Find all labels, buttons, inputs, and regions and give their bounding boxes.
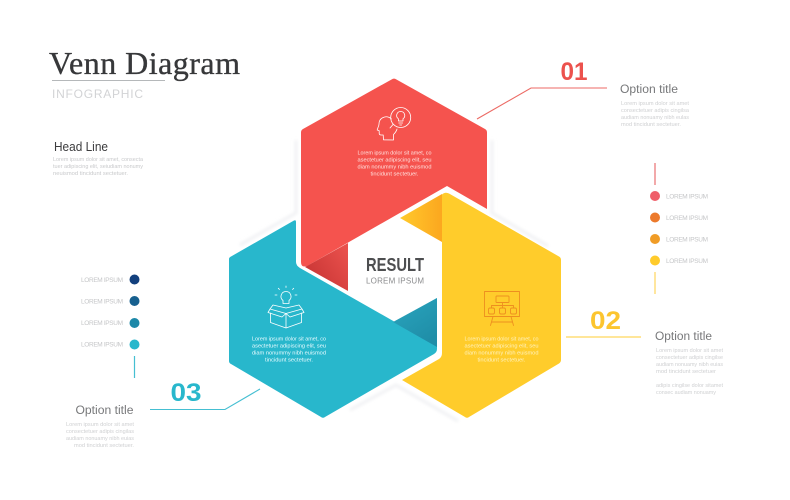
text: yellow panel	[464, 336, 538, 364]
legend: right	[650, 163, 708, 294]
icon: box with light bulb	[268, 286, 304, 328]
callout: 02: 02	[590, 307, 621, 335]
panel: center result	[366, 255, 424, 286]
text: teal panel: diam nonummy nibh euismod	[252, 350, 326, 356]
icon: presentation board	[484, 292, 520, 326]
text block: head line: tuer adipiscing elit, seiudiam nonumy	[53, 164, 143, 170]
text: red panel: Lorem ipsum dolor sit amet, co	[358, 150, 432, 156]
text block: option 1: consectetuer adipis cingilsa	[621, 108, 690, 114]
title	[49, 45, 240, 101]
panel: teal hexagon	[229, 220, 437, 418]
fold: yellow	[400, 194, 442, 242]
text block: option 3: Option title	[76, 405, 134, 417]
text: yellow panel: asectetuer adipiscing elit, seu	[464, 344, 538, 350]
fold: red	[305, 243, 348, 291]
callout: 03	[66, 379, 260, 449]
panel: center result: LOREM IPSUM	[366, 276, 424, 286]
text block: option 1: Option title	[620, 84, 678, 96]
text block: option 3: mod tincidunt sectetuer.	[74, 443, 134, 449]
text: teal panel: Lorem ipsum dolor sit amet, co	[252, 336, 326, 342]
text: red panel: tincidunt sectetuer.	[370, 172, 419, 178]
legend: right: LOREM IPSUM	[666, 194, 708, 200]
legend: right: LOREM IPSUM	[666, 258, 708, 265]
soft shadow in the hexagon notches	[240, 140, 548, 421]
legend: right: LOREM IPSUM	[666, 215, 708, 222]
text block: head line: Head Line	[54, 140, 108, 154]
text: yellow panel: diam nonummy nibh euismod	[464, 350, 538, 356]
callout: 01	[477, 58, 690, 128]
title: INFOGRAPHIC	[52, 87, 143, 101]
text block: option 3: consectetuer adipis cingilas	[66, 429, 134, 435]
text: teal panel: tincidunt sectetuer.	[265, 358, 313, 364]
legend: left: LOREM IPSUM	[81, 320, 123, 327]
text block: option 3	[66, 405, 134, 449]
text: red panel: diam nonummy nibh euismod	[358, 164, 432, 170]
text block: option 2: consec audiam nonuamy	[656, 390, 716, 396]
text block: option 1: Lorem ipsum dolor sit amet	[621, 101, 689, 107]
text block: option 2	[655, 331, 723, 396]
text block: option 2: Option title	[655, 331, 712, 343]
panel: yellow hexagon	[400, 193, 561, 418]
text block: option 2: adipis cingilse dolor sitamet	[656, 383, 723, 389]
text block: head line: Lorem ipsum dolor sit amet, consecta	[53, 157, 144, 163]
callout: 02	[566, 307, 723, 396]
text: yellow panel: Lorem ipsum dolor sit amet, co	[464, 336, 538, 342]
text: yellow panel: tincidunt sectetuer.	[478, 358, 526, 364]
text: teal panel: asectetuer adipiscing elit, seu	[252, 344, 326, 350]
legend: left	[81, 274, 140, 378]
callout: 01: 01	[560, 58, 588, 86]
icon: head with light bulb	[377, 108, 411, 140]
text block: option 2: mod tincidunt sectetuer	[656, 369, 716, 375]
text block: head line	[53, 140, 144, 177]
text: red panel	[358, 150, 432, 178]
text block: option 3: Lorem ipsum dolor sit amet	[66, 422, 134, 428]
text block: option 3: audiam nonuamy nibh euias	[66, 436, 134, 442]
title: Venn Diagram	[49, 45, 240, 81]
legend: left: LOREM IPSUM	[81, 298, 123, 306]
legend: left: LOREM IPSUM	[81, 277, 123, 284]
text block: option 1: audiam nonuamy nibh eulas	[621, 115, 689, 121]
text block: option 2: consectetuer adipis cingilse	[656, 355, 723, 361]
text: teal panel	[252, 336, 326, 364]
legend: left: LOREM IPSUM	[81, 342, 123, 348]
panel: center result: RESULT	[366, 255, 424, 275]
text: red panel: asectetuer adipiscing elit, seu	[358, 158, 432, 164]
text block: option 1	[620, 84, 690, 128]
fold: teal	[393, 298, 437, 347]
text block: head line: neuismod tincidunt sectetuer.	[53, 171, 128, 177]
legend: right: LOREM IPSUM	[666, 236, 708, 244]
text block: option 2: Lorem ipsum dolor sit amet	[656, 348, 723, 354]
text block: option 1: mod tincidunt sectetuer.	[621, 122, 681, 128]
callout: 03: 03	[170, 379, 202, 407]
text block: option 2: audiam nonuamy nibh euias	[656, 362, 723, 368]
panel: red hexagon	[301, 79, 487, 291]
